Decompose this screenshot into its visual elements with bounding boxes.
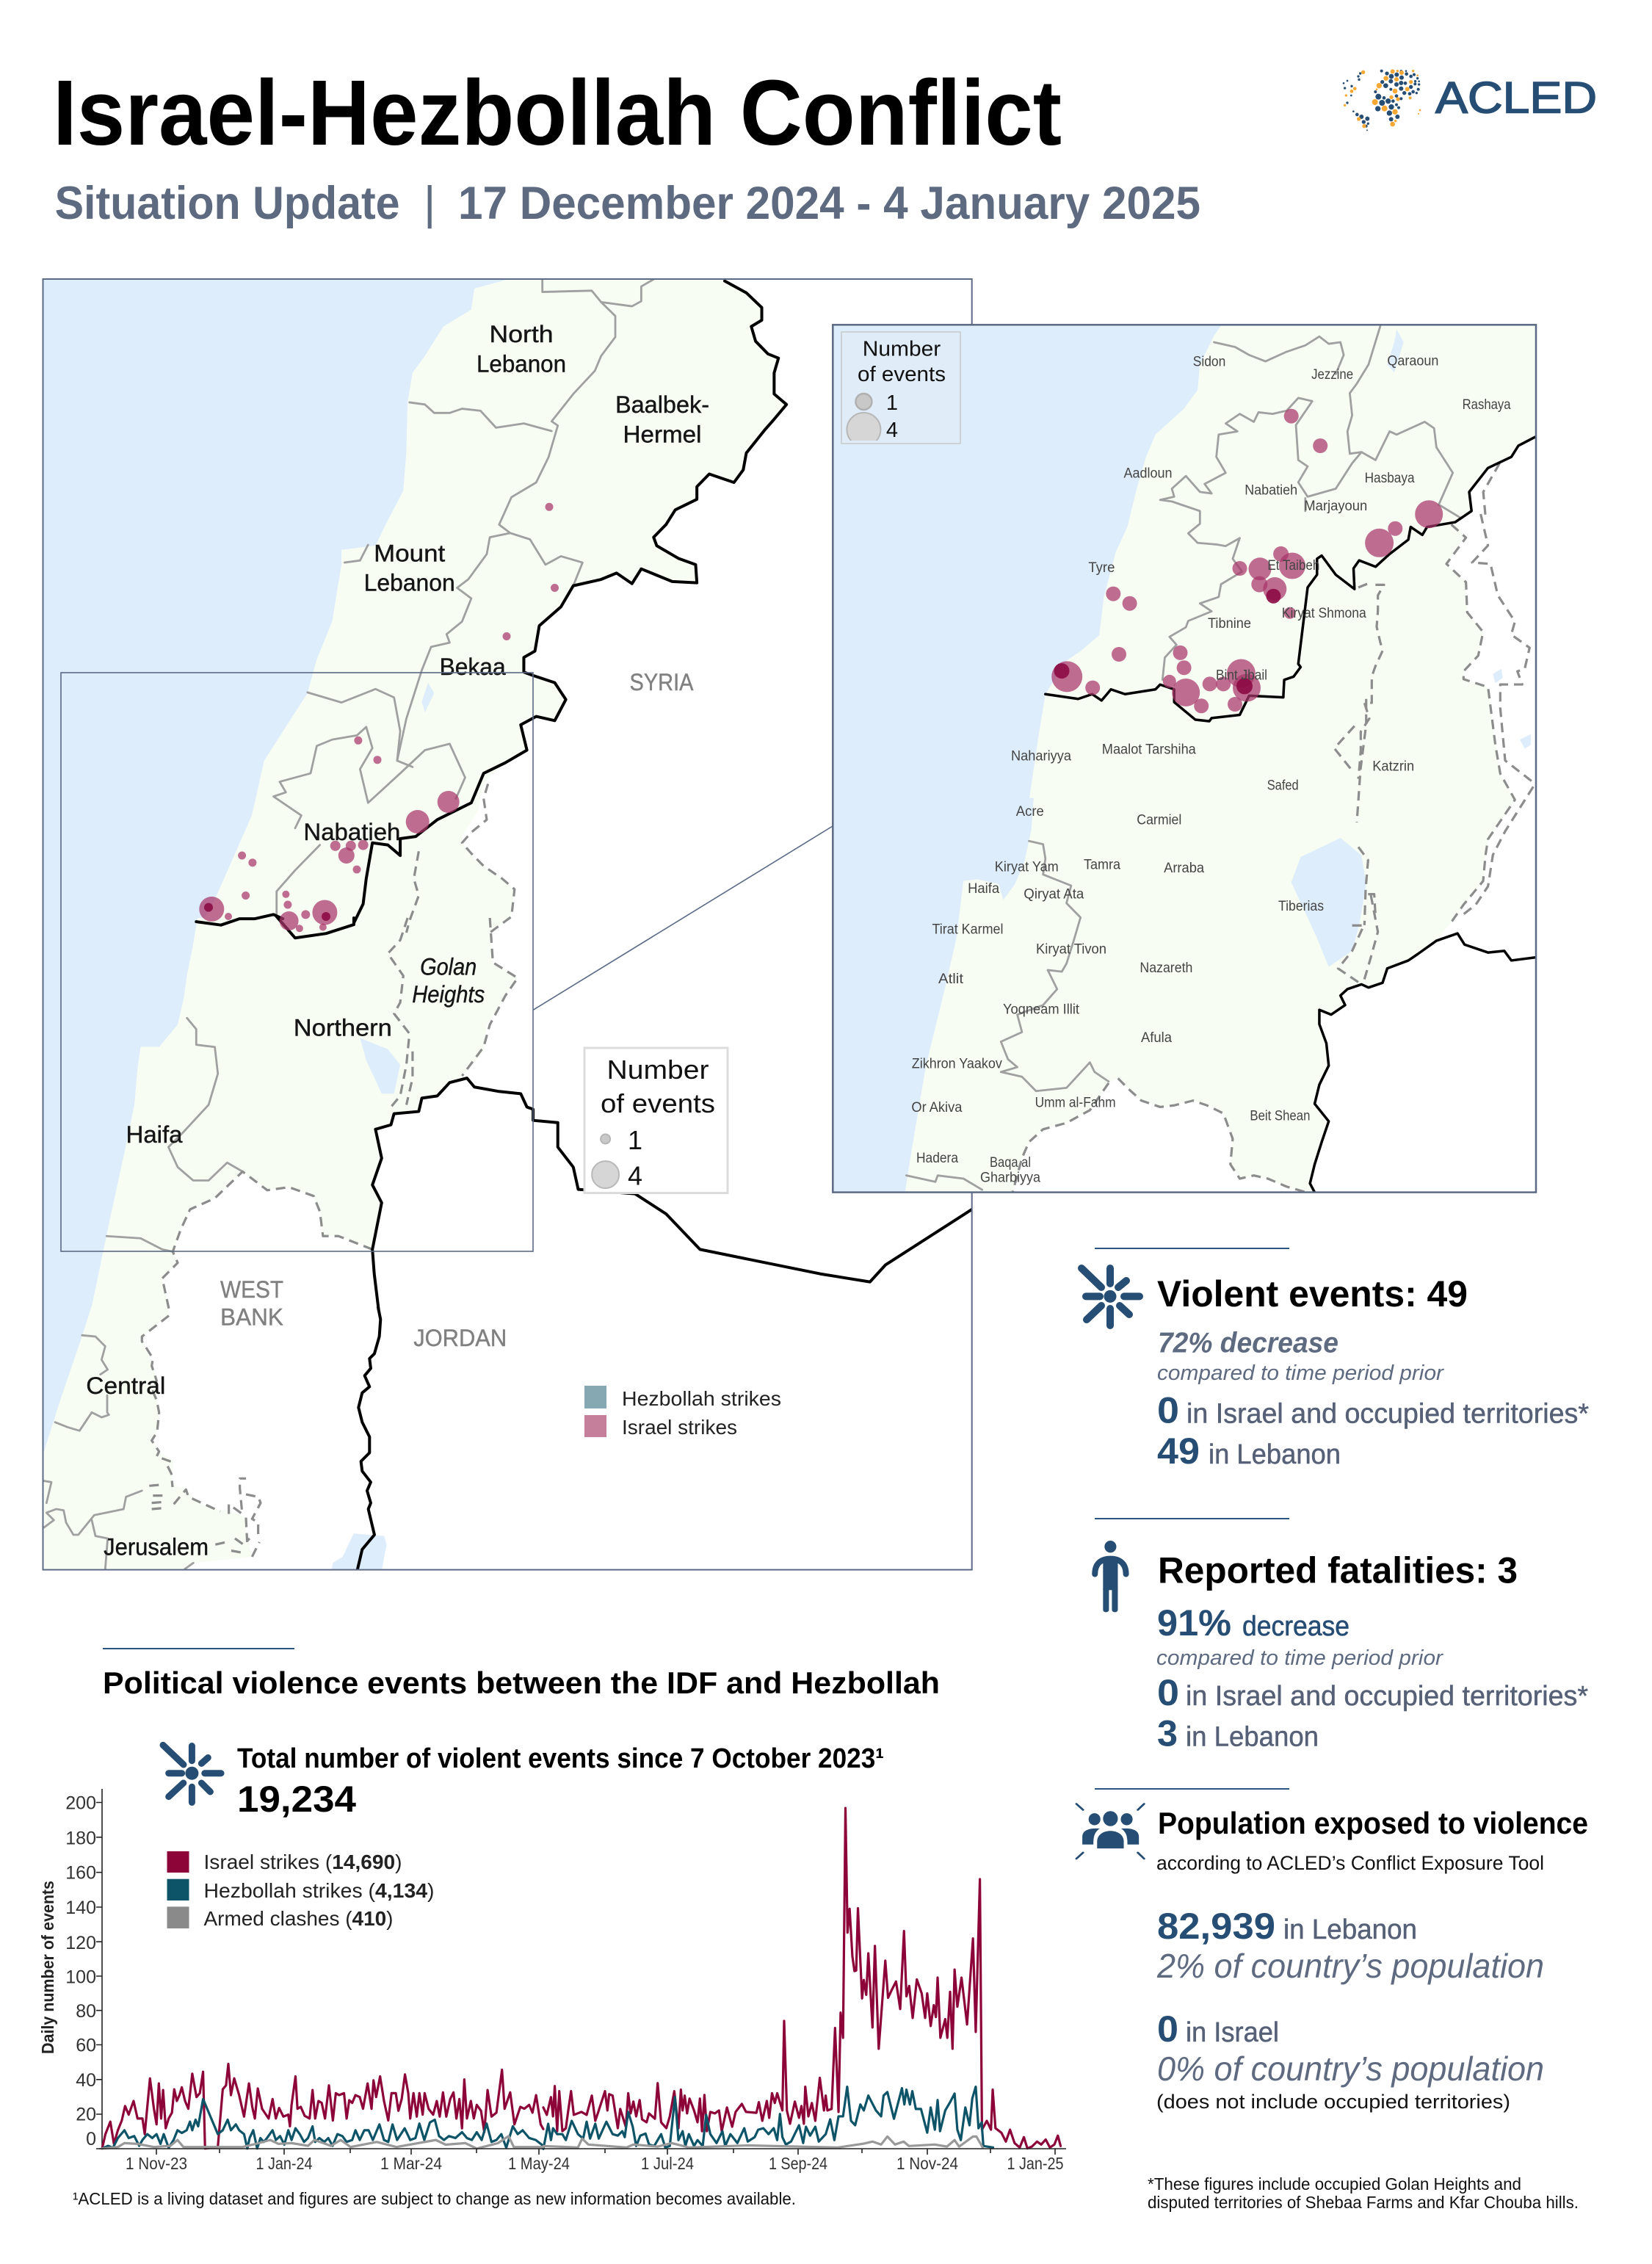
map: region labels: WEST (220, 1276, 283, 1303)
stat: Lebanon exposure: in Lebanon (1283, 1914, 1417, 1945)
chart legend (167, 1851, 435, 1930)
x axis (99, 2149, 1066, 2173)
inset: place labels: Zikhron Yaakov (912, 1056, 1002, 1072)
note: comparison: compared to time period prior (1157, 1361, 1444, 1385)
panel: chart (38, 1649, 1066, 2208)
inset: place labels: Et Taibeh (1267, 558, 1319, 574)
map: region labels: North (489, 321, 554, 347)
chart legend: Hezbollah strikes (4,134) (204, 1879, 435, 1902)
inset: place labels: Qaraoun (1387, 354, 1438, 369)
inset: place labels: Nabatieh (1245, 482, 1297, 498)
stat: Israel events (1157, 1389, 1589, 1431)
footnote: occupied territories (1148, 2174, 1579, 2212)
inset: place labels: Nazareth (1140, 961, 1192, 976)
icon: person (1095, 1541, 1126, 1612)
stat: Israel exposure (1157, 2008, 1279, 2050)
inset: place labels: Maalot Tarshiha (1102, 742, 1196, 757)
inset: place labels: Kiryat Shmona (1282, 606, 1366, 621)
stat: Lebanon exposure (1157, 1906, 1417, 1947)
inset: place labels: Atlit (938, 972, 964, 987)
inset: place labels: Sidon (1193, 354, 1225, 370)
x axis: 1 Jan-25 (1007, 2154, 1063, 2173)
inset: place labels: Tiberias (1278, 899, 1324, 914)
line: Hezbollah strikes (102, 2087, 993, 2149)
map: land (44, 279, 786, 1570)
stat: Lebanon events: in Lebanon (1209, 1439, 1341, 1470)
icon: violence burst (163, 1745, 221, 1802)
map: region labels: Bekaa (440, 654, 506, 680)
y axis: 120 (65, 1933, 96, 1953)
inset: place labels: Hasbaya (1365, 471, 1415, 486)
inset: place labels: Acre (1016, 804, 1044, 820)
subtitle: Situation Update (55, 178, 400, 229)
y axis: 20 (76, 2105, 96, 2125)
inset map (38, 323, 1589, 2212)
map: region labels: Haifa (126, 1121, 183, 1148)
map: number of events legend: 4 (628, 1160, 642, 1191)
inset: place labels: Tyre (1088, 560, 1115, 576)
inset: place labels: Nahariyya (1011, 748, 1071, 764)
inset: international borders (1046, 437, 1536, 1193)
main map (29, 272, 972, 1570)
inset: place labels: Hadera (916, 1151, 958, 1166)
x axis: 1 May-24 (508, 2154, 570, 2173)
title: Israel-Hezbollah Conflict (53, 61, 1062, 164)
icon: violence burst (1082, 1268, 1140, 1326)
inset: place labels: Umm al-Fahm (1035, 1095, 1116, 1110)
footnote: occupied territories: *These figures include occupied Golan Heights and (1148, 2174, 1521, 2194)
stat: Lebanon fatalities: 3 (1157, 1713, 1178, 1754)
map: region labels: Mount (374, 540, 445, 566)
inset: place labels: Gharbiyya (980, 1170, 1040, 1185)
map: region labels: SYRIA (630, 669, 694, 695)
inset: place labels: Afula (1141, 1030, 1172, 1046)
inset: place labels: Beit Shean (1250, 1109, 1310, 1124)
map: region labels: Nabatieh (303, 819, 400, 845)
note: comparison: compared to time period prior (1156, 1646, 1443, 1670)
footnote: occupied territories: disputed territories of Shebaa Farms and Kfar Chouba hills. (1148, 2193, 1579, 2212)
stat: decrease: decrease (1242, 1611, 1350, 1642)
inset: number of events legend: Number (863, 338, 941, 361)
line: Armed clashes (102, 2136, 982, 2149)
map: number of events legend (584, 1048, 728, 1193)
stat: Israel events: 0 (1157, 1389, 1179, 1431)
map: number of events legend: Number (606, 1055, 709, 1085)
map: frame (43, 279, 972, 1570)
inset: place labels: Or Akiva (911, 1100, 963, 1115)
ACLED logo (1343, 69, 1597, 131)
subtitle (55, 178, 1200, 229)
map: region labels: Northern (294, 1015, 392, 1041)
note: exclusion: (does not include occupied territories) (1156, 2091, 1510, 2113)
line: Israel strikes (102, 1808, 1061, 2149)
map: region labels: Lebanon (364, 570, 455, 596)
map: international borders (196, 281, 972, 1570)
total events label: Total number of violent events since 7 October 2023¹ (237, 1743, 884, 1774)
inset: event bubbles (1051, 409, 1443, 713)
stat: Israel exposure: in Israel (1186, 2017, 1279, 2048)
ACLED logo: ACLED (1435, 73, 1597, 122)
stat: Israel share: 0% of country’s population (1157, 2050, 1544, 2088)
y axis: 80 (76, 2001, 96, 2022)
map: region labels: Jerusalem (104, 1534, 209, 1560)
y axis: 140 (65, 1898, 96, 1918)
x axis: 1 Mar-24 (380, 2154, 442, 2173)
inset: sea (827, 323, 1221, 1193)
y axis: 60 (76, 2036, 96, 2056)
stat: decrease: 72% decrease (1158, 1328, 1338, 1359)
map: region labels: BANK (220, 1303, 283, 1330)
inset: place labels: Haifa (968, 881, 1000, 897)
stat: Israel exposure: 0 (1157, 2008, 1178, 2050)
x axis: 1 Sep-24 (769, 2154, 827, 2173)
stat: Israel fatalities: 0 (1157, 1672, 1179, 1713)
panel: violent events (1082, 1248, 1589, 1472)
inset: place labels: Aadloun (1123, 466, 1172, 481)
map: region labels: Baalbek- (615, 391, 709, 418)
inset: place labels: Tirat Karmel (932, 922, 1003, 937)
inset: place labels: Kiryat Yam (995, 859, 1059, 875)
inset: number of events legend: 1 (886, 391, 898, 415)
map: region labels (86, 321, 709, 1560)
stat: Israel fatalities: in Israel and occupied territories* (1186, 1681, 1588, 1712)
y axis: 160 (65, 1863, 96, 1884)
map: admin boundaries (44, 279, 653, 1569)
x axis: 1 Nov-24 (896, 2154, 958, 2173)
map: strike colour legend: Hezbollah strikes (622, 1387, 781, 1410)
panel: reported fatalities (1095, 1519, 1588, 1754)
heading: population: Population exposed to violence (1158, 1806, 1588, 1840)
chart heading: Political violence events between the IDF and Hezbollah (103, 1666, 940, 1700)
map: lakes (332, 683, 434, 1570)
inset: place labels: Katzrin (1372, 759, 1414, 774)
stat: Lebanon share: 2% of country’s population (1156, 1947, 1544, 1985)
subtitle: | (424, 178, 435, 229)
x axis: 1 Jan-24 (256, 2154, 313, 2173)
stat: Lebanon exposure: 82,939 (1157, 1906, 1275, 1947)
inset: place labels: Safed (1267, 778, 1299, 793)
map: strike colour legend: Israel strikes (622, 1416, 737, 1439)
stat: Lebanon events (1157, 1431, 1341, 1472)
inset: place labels: Jezzine (1311, 367, 1353, 383)
heading: violent events: Violent events: 49 (1157, 1273, 1468, 1314)
inset: number of events legend (841, 332, 960, 446)
y axis: 0 (86, 2129, 96, 2149)
map: region labels: Heights (412, 981, 485, 1008)
stat: Lebanon fatalities: in Lebanon (1186, 1722, 1319, 1753)
map: region labels: Golan (420, 953, 477, 980)
y axis: 200 (65, 1793, 96, 1814)
inset: areas outside (1012, 437, 1544, 1195)
stat: Israel events: in Israel and occupied territories* (1187, 1398, 1589, 1429)
panel: population exposed (1076, 1789, 1588, 2113)
inset frame (833, 325, 1536, 1193)
x axis: 1 Nov-23 (126, 2154, 187, 2173)
chart legend: Armed clashes (410) (204, 1907, 394, 1930)
stat: Lebanon events: 49 (1157, 1431, 1200, 1472)
map: strike colour legend (584, 1386, 781, 1439)
x axis: 1 Jul-24 (641, 2154, 694, 2173)
inset: place labels: Baqa al (990, 1155, 1031, 1171)
y axis: 100 (65, 1967, 96, 1987)
inset: place labels: Bint Jbail (1216, 668, 1267, 684)
map: number of events legend: 1 (628, 1125, 642, 1155)
y axis: 180 (65, 1828, 96, 1848)
subtitle: 17 December 2024 - 4 January 2025 (458, 178, 1200, 229)
inset: place labels: Marjayoun (1304, 499, 1367, 514)
stat: Lebanon fatalities (1157, 1713, 1319, 1754)
inset: lakes (1291, 330, 1531, 967)
inset: place labels: Arraba (1164, 861, 1205, 876)
inset: number of events legend: of events (858, 363, 946, 386)
map: region labels: Hermel (623, 422, 702, 448)
inset: place labels: Kiryat Tivon (1036, 941, 1106, 957)
chart legend: Israel strikes (14,690) (204, 1851, 402, 1873)
total events value: 19,234 (237, 1779, 356, 1820)
y axis: 40 (76, 2070, 96, 2091)
footnote: living dataset: ¹ACLED is a living dataset and figures are subject to change as new information becomes available. (73, 2189, 796, 2208)
connector from locator to inset (533, 826, 833, 1010)
inset: number of events legend: 4 (886, 419, 898, 442)
map: inset locator rectangle (61, 673, 533, 1251)
icon: crowd (1076, 1804, 1144, 1859)
inset: place labels: Qiryat Ata (1024, 886, 1084, 902)
inset: place labels: Tamra (1084, 858, 1120, 872)
y axis (38, 1789, 102, 2149)
heading: fatalities: Reported fatalities: 3 (1158, 1550, 1518, 1591)
stat: Israel fatalities (1157, 1672, 1588, 1713)
map: number of events legend: of events (601, 1088, 715, 1118)
inset: place labels: Rashaya (1463, 397, 1511, 413)
y axis: Daily number of events (38, 1881, 57, 2054)
map: region labels: JORDAN (413, 1325, 507, 1351)
map: sea (29, 272, 508, 1454)
note: source tool: according to ACLED’s Conflict Exposure Tool (1156, 1852, 1544, 1874)
inset: place labels (911, 354, 1511, 1185)
map: region labels: Lebanon (477, 351, 566, 377)
inset: place labels: Carmiel (1137, 813, 1181, 828)
inset: admin boundaries (906, 326, 1533, 1193)
stat: decrease: 91% (1157, 1602, 1231, 1643)
map: region labels: Central (86, 1372, 165, 1399)
inset: place labels: Tibnine (1208, 616, 1251, 632)
inset: place labels: Yoqneam Illit (1003, 1002, 1080, 1017)
stat: decrease (1157, 1602, 1350, 1643)
map: event bubbles (199, 503, 559, 932)
